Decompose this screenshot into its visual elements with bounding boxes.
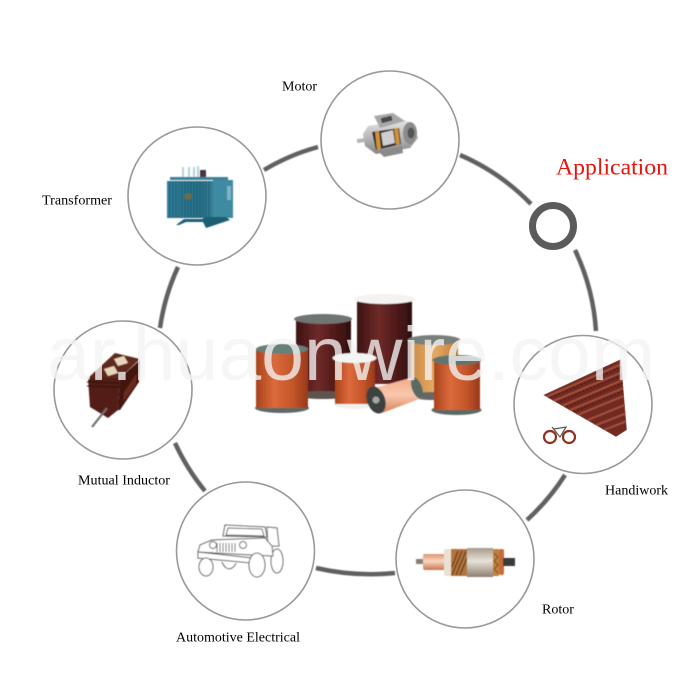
circle: rotor	[396, 490, 534, 628]
label: Motor: Motor	[282, 78, 318, 94]
icon: transformer	[167, 166, 233, 228]
spool: right copper	[432, 355, 482, 415]
icon: wire bicycle	[544, 427, 575, 443]
spool: rear dark	[294, 314, 352, 399]
icon: mutual inductor	[87, 353, 140, 427]
heading: Application: Application	[556, 154, 668, 180]
icon: woven wire mat	[543, 359, 627, 437]
center product: enamelled wire spools	[255, 294, 482, 416]
ring arc segments	[160, 147, 596, 574]
spool: white flange copper	[332, 353, 376, 409]
spool: left copper	[255, 344, 309, 413]
circle: motor	[321, 71, 459, 209]
circle: automotive electrical	[176, 482, 314, 620]
icon: rotor	[416, 548, 515, 577]
ring accent	[532, 206, 574, 246]
watermark: ar.huaonwire.com	[47, 312, 655, 397]
label: Handiwork: Handiwork	[605, 482, 668, 498]
circle: transformer	[128, 127, 266, 265]
label: Rotor: Rotor	[542, 602, 575, 616]
label: Transformer: Transformer	[42, 192, 113, 208]
icon: motor	[357, 113, 418, 157]
spool: tall dark	[354, 294, 416, 384]
label: Automotive Electrical: Automotive Electrical	[176, 630, 300, 644]
label: Mutual Inductor: Mutual Inductor	[78, 472, 171, 488]
circle: handiwork	[514, 336, 652, 474]
spool: small lying copper	[363, 376, 425, 416]
spool: gold	[408, 335, 460, 400]
icon: jeep line drawing	[198, 525, 283, 577]
circle: mutual inductor	[54, 321, 192, 459]
